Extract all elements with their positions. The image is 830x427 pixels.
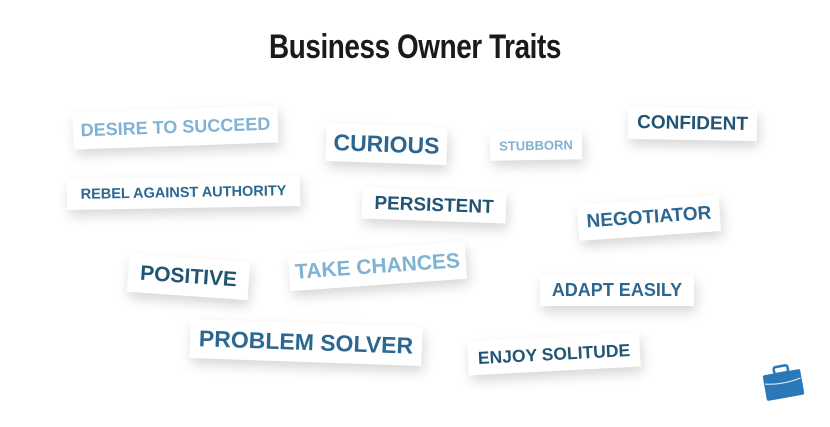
tag: confident: CONFIDENT [637, 112, 748, 135]
tag: problem solver: PROBLEM SOLVER [198, 325, 414, 359]
tag: desire to succeed: DESIRE TO SUCCEED [80, 114, 271, 140]
tag: enjoy solitude: ENJOY SOLITUDE [477, 340, 631, 367]
tag: take chances [288, 242, 467, 291]
tag: desire to succeed [72, 105, 279, 150]
tag: negotiator: NEGOTIATOR [586, 203, 712, 232]
tag: positive [127, 254, 250, 300]
tag: adapt easily: ADAPT EASILY [552, 280, 682, 300]
tag: stubborn [490, 130, 582, 161]
tag: persistent: PERSISTENT [374, 192, 494, 218]
tag: confident [628, 107, 757, 141]
tag: enjoy solitude [467, 333, 641, 375]
tag: adapt easily [540, 275, 694, 306]
tag: negotiator [577, 195, 721, 241]
tag: curious: CURIOUS [333, 129, 440, 158]
tag: positive: POSITIVE [139, 262, 238, 291]
tag: stubborn: STUBBORN [499, 137, 573, 154]
icon: briefcase [762, 364, 804, 401]
tag: take chances: TAKE CHANCES [294, 249, 461, 283]
tag: rebel against authority: REBEL AGAINST AUTHORITY [81, 183, 286, 202]
tag: persistent [362, 187, 506, 224]
tag: curious [325, 123, 448, 165]
title: Business Owner Traits [269, 28, 561, 66]
tag: problem solver [189, 319, 423, 366]
tag: rebel against authority [67, 175, 300, 210]
